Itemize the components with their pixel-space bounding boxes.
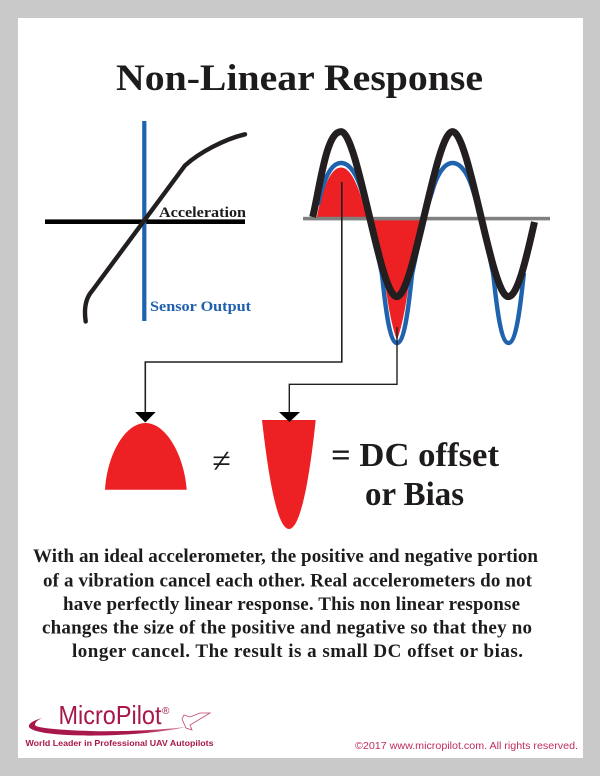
not equal sign: ≠: [212, 443, 231, 480]
logo plane: [182, 713, 210, 730]
DC offset text: or Bias: [365, 476, 464, 513]
chart: ideal and actual waves: [303, 132, 550, 343]
label: sensor output: Sensor Output: [150, 299, 251, 315]
body text: [33, 546, 538, 662]
MicroPilot logo: [26, 700, 214, 748]
red positive area: [317, 168, 367, 218]
baseline: [303, 217, 550, 220]
body text: of a vibration cancel each other. Real accelerometers do not: [43, 570, 533, 592]
arrow: negative portion: [279, 327, 397, 422]
chart: sensor response curve: [45, 121, 251, 322]
copyright: ©2017 www.micropilot.com. All rights reserved.: [355, 741, 578, 752]
black actual wave: [313, 132, 534, 297]
logo wordmark: MicroPilot: [58, 700, 162, 730]
axis: acceleration: [45, 219, 245, 224]
red negative shape: [262, 420, 316, 529]
red negative area: [373, 219, 421, 340]
registered mark: ®: [162, 706, 170, 717]
body text: With an ideal accelerometer, the positive and negative portion: [33, 546, 538, 567]
red positive shape: [105, 423, 187, 490]
DC offset text: = DC offset: [331, 437, 500, 474]
response curve: [85, 134, 245, 322]
axis: sensor output: [142, 121, 146, 321]
body text: longer cancel. The result is a small DC offset or bias.: [72, 641, 523, 662]
body text: changes the size of the positive and negative so that they no: [42, 618, 532, 638]
title: Non-Linear Response: [116, 58, 483, 99]
label: acceleration: Acceleration: [159, 205, 247, 221]
blue ideal wave: [318, 163, 524, 343]
DC offset text: [331, 437, 500, 513]
logo swoosh: [29, 718, 186, 736]
logo tagline: World Leader in Professional UAV Autopilots: [26, 738, 214, 748]
body text: have perfectly linear response. This non linear response: [63, 594, 520, 615]
arrow: positive portion: [135, 182, 342, 422]
